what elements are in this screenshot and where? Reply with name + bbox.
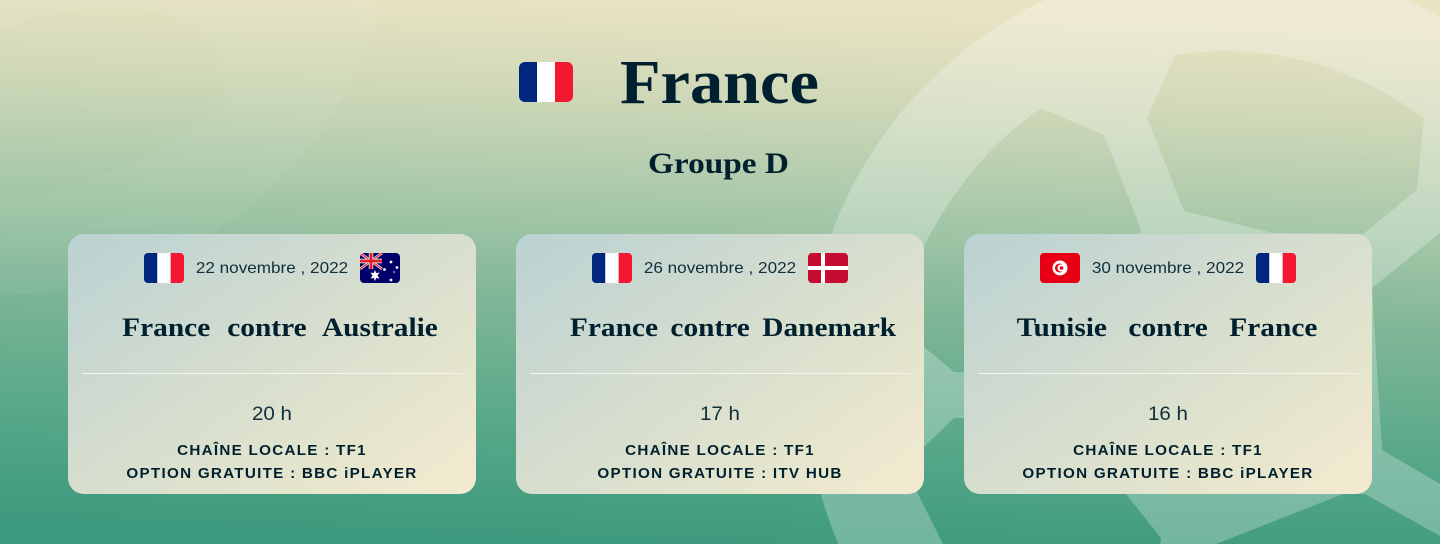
broadcast info: CHAÎNE LOCALE : TF1 — [1073, 443, 1263, 459]
kick-off time: 20 h — [252, 404, 292, 425]
match date: 22 novembre , 2022 — [196, 260, 348, 277]
match date: 26 novembre , 2022 — [644, 260, 796, 277]
broadcast info — [1022, 442, 1314, 482]
panel: match Tunisia vs France — [964, 234, 1372, 494]
title: France — [620, 49, 819, 117]
divider — [530, 373, 909, 374]
icon: flag Australia — [360, 253, 400, 283]
panel: match France vs Australia — [68, 234, 476, 494]
kick-off time: 16 h — [1148, 404, 1188, 425]
match date: 30 novembre , 2022 — [1092, 260, 1244, 277]
divider — [978, 373, 1357, 374]
icon: flag Denmark — [808, 253, 848, 283]
broadcast info: OPTION GRATUITE : ITV HUB — [597, 466, 843, 482]
kick-off time: 17 h — [700, 404, 740, 425]
match title: Tunisie contre France — [1016, 313, 1317, 342]
icon: flag France — [592, 253, 632, 283]
panel: match France vs Denmark — [516, 234, 924, 494]
broadcast info — [597, 442, 843, 482]
icon: flag Tunisia — [1040, 253, 1080, 283]
subtitle: group: Groupe D — [648, 147, 789, 180]
icon: flag France — [1256, 253, 1296, 283]
match title: France contre Australie — [122, 313, 438, 342]
icon: flag France — [144, 253, 184, 283]
broadcast info: OPTION GRATUITE : BBC iPLAYER — [126, 466, 418, 482]
divider — [82, 373, 461, 374]
match title: France contre Danemark — [570, 313, 896, 342]
broadcast info: CHAÎNE LOCALE : TF1 — [625, 443, 815, 459]
broadcast info — [126, 442, 418, 482]
broadcast info: CHAÎNE LOCALE : TF1 — [177, 443, 367, 459]
header flag: France — [519, 62, 573, 102]
broadcast info: OPTION GRATUITE : BBC iPLAYER — [1022, 466, 1314, 482]
